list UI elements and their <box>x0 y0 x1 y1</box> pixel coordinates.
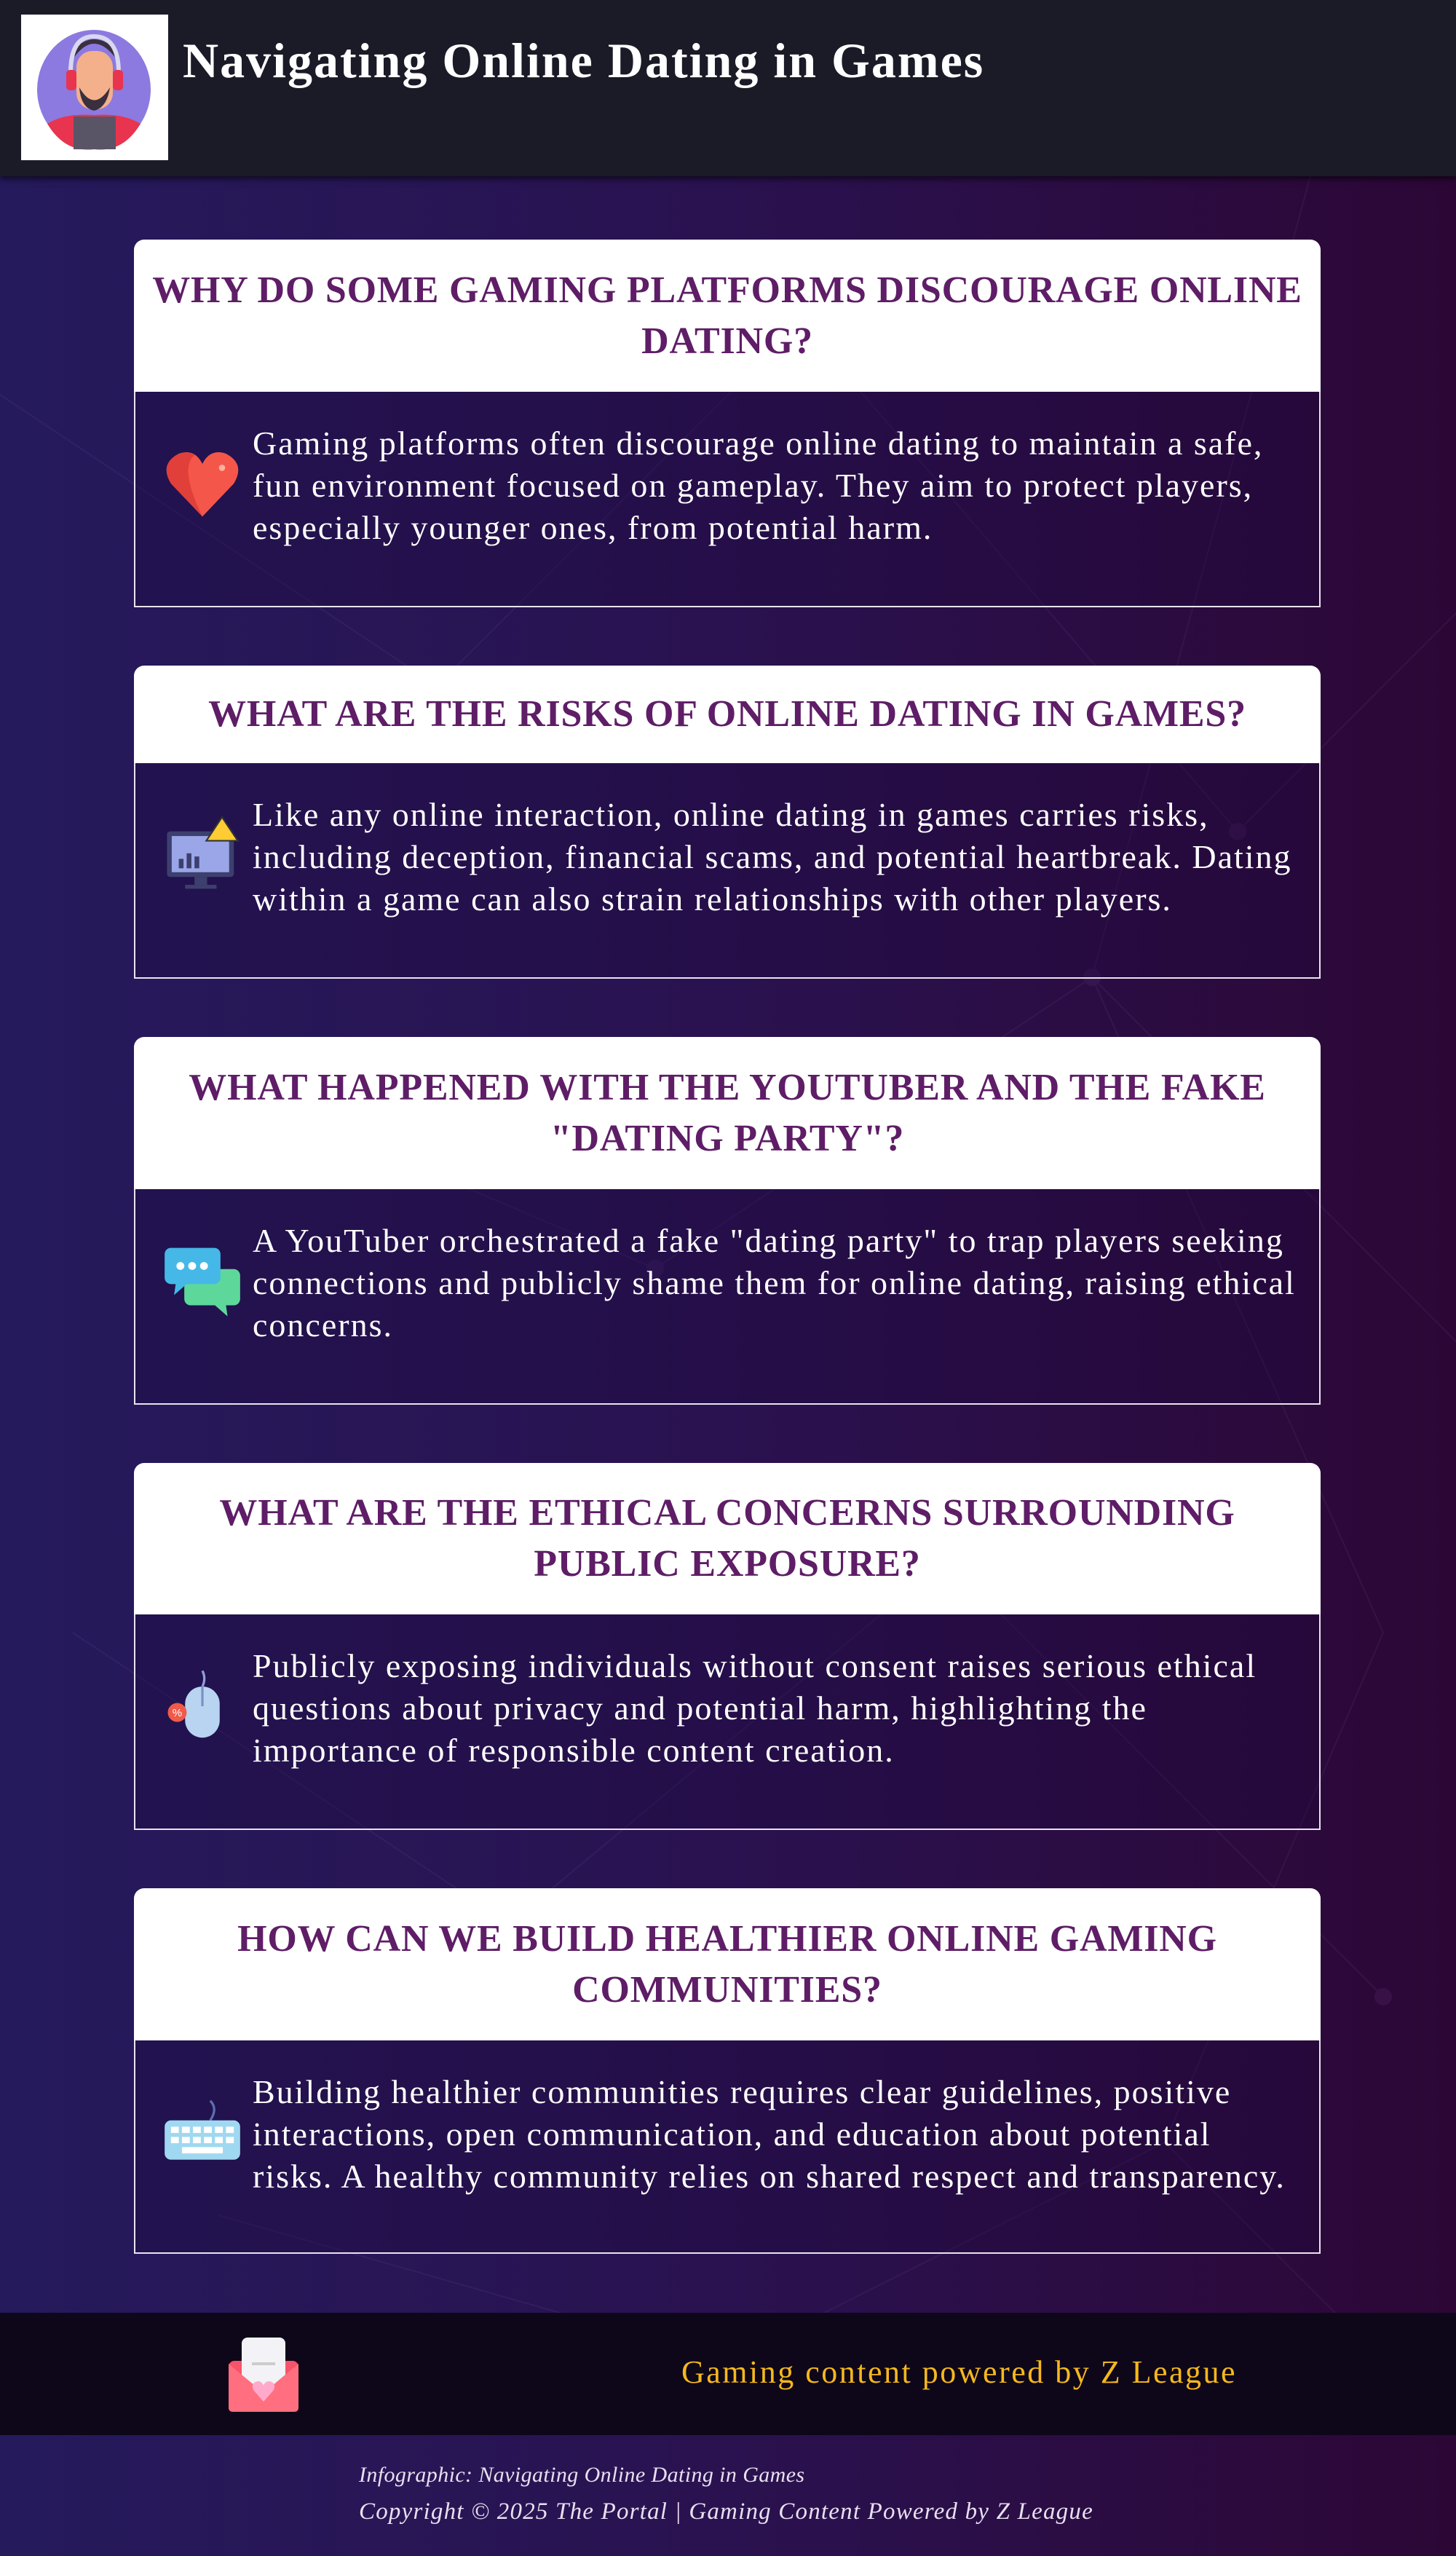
body <box>134 763 1321 979</box>
copyright notes: Infographic: Navigating Online Dating in Games <box>359 2463 805 2487</box>
panel: risks <box>134 666 1321 979</box>
icon: love letter <box>229 2338 298 2412</box>
text: interactions, open communication, and education about potential <box>253 2115 1211 2153</box>
copyright notes: Copyright © 2025 The Portal | Gaming Content Powered by Z League <box>359 2498 1093 2525</box>
icon: mouse: % <box>173 1707 182 1719</box>
text: Building healthier communities requires clear guidelines, positive <box>253 2073 1231 2110</box>
text: Publicly exposing individuals without consent raises serious ethical <box>253 1647 1257 1684</box>
body <box>134 392 1321 607</box>
heading <box>134 1037 1321 1189</box>
title: Navigating Online Dating in Games <box>183 33 984 88</box>
text: A YouTuber orchestrated a fake "dating party" to trap players seeking <box>253 1222 1284 1259</box>
panel: ethical concerns <box>134 1463 1321 1830</box>
text <box>253 1222 1296 1344</box>
text: connections and publicly shame them for online dating, raising ethical <box>253 1264 1296 1301</box>
body <box>134 2040 1321 2254</box>
panel: why platforms discourage <box>134 240 1321 607</box>
heading: "DATING PARTY"? <box>550 1117 904 1159</box>
copyright notes <box>358 2463 1093 2525</box>
heading <box>134 1463 1321 1614</box>
text <box>253 796 1292 918</box>
text: Like any online interaction, online dating in games carries risks, <box>253 796 1209 833</box>
text: importance of responsible content creation. <box>253 1732 895 1769</box>
logo: gamer avatar <box>21 15 168 160</box>
text: concerns. <box>253 1306 393 1344</box>
text: questions about privacy and potential harm, highlighting the <box>253 1689 1147 1727</box>
body <box>134 1614 1321 1830</box>
text <box>253 2073 1286 2195</box>
icon: chat bubbles <box>165 1248 240 1317</box>
heading: WHAT ARE THE RISKS OF ONLINE DATING IN GAMES? <box>208 693 1246 735</box>
heading: WHY DO SOME GAMING PLATFORMS DISCOURAGE ONLINE <box>152 269 1302 310</box>
heading <box>134 1888 1321 2040</box>
heading: HOW CAN WE BUILD HEALTHIER ONLINE GAMING <box>237 1918 1217 1959</box>
text: Gaming platforms often discourage online dating to maintain a safe, <box>253 425 1263 462</box>
footer band <box>0 2313 1456 2435</box>
heading: COMMUNITIES? <box>572 1969 882 2010</box>
icon: keyboard <box>165 2100 240 2160</box>
heading: DATING? <box>641 320 813 361</box>
heading <box>134 240 1321 392</box>
text <box>253 425 1263 546</box>
text: including deception, financial scams, and potential heartbreak. Dating <box>253 838 1292 875</box>
text: especially younger ones, from potential harm. <box>253 509 933 546</box>
text: risks. A healthy community relies on shared respect and transparency. <box>253 2158 1286 2195</box>
icon: mouse <box>167 1671 220 1737</box>
heading <box>134 666 1321 763</box>
body <box>134 1189 1321 1405</box>
panel: healthier communities <box>134 1888 1321 2254</box>
icon: monitor warning <box>167 816 239 888</box>
heading: WHAT HAPPENED WITH THE YOUTUBER AND THE FAKE <box>189 1066 1266 1108</box>
text: fun environment focused on gameplay. They aim to protect players, <box>253 467 1253 504</box>
text: within a game can also strain relationships with other players. <box>253 880 1172 918</box>
heading: WHAT ARE THE ETHICAL CONCERNS SURROUNDING <box>219 1492 1235 1534</box>
text <box>253 1647 1257 1769</box>
heading: PUBLIC EXPOSURE? <box>534 1543 921 1585</box>
header bar <box>0 0 1456 176</box>
icon: heart <box>166 452 239 517</box>
panel: youtuber fake dating party <box>134 1037 1321 1405</box>
footer credit: Gaming content powered by Z League <box>681 2354 1237 2390</box>
